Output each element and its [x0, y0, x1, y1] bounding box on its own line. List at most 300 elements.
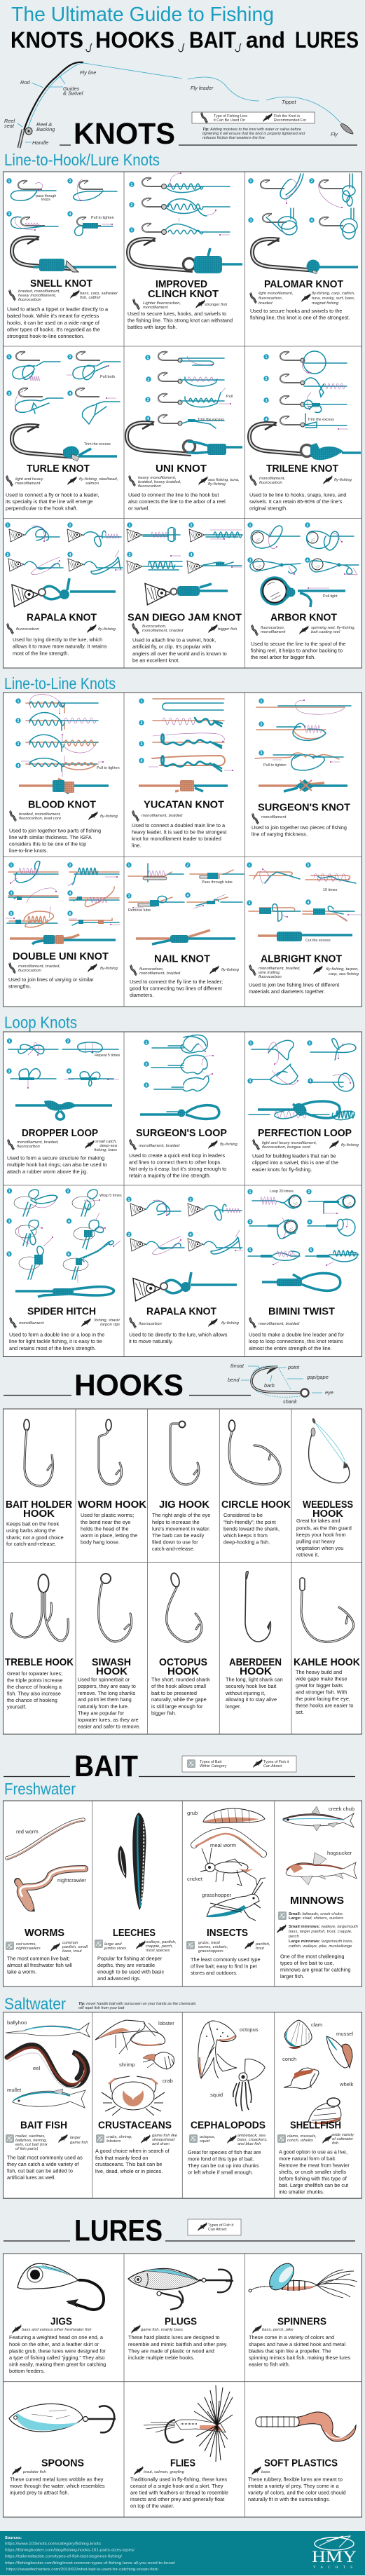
knot: nail	[126, 862, 244, 998]
knot: double uni: 5	[11, 912, 13, 916]
description: Great for lakes and	[296, 1518, 340, 1524]
title: HOOK	[23, 1508, 55, 1520]
title: HOOKS	[95, 27, 174, 53]
title: SHELLFISH	[290, 2120, 341, 2132]
bait types: ballyhoo, herring,	[15, 2139, 47, 2143]
line types	[132, 624, 184, 634]
target fish	[207, 624, 237, 633]
knot: spider hitch: 6	[68, 1253, 70, 1257]
knot: san diego jam: 2	[191, 524, 193, 528]
bait: insects: grasshopper	[202, 1892, 232, 1898]
knot: trilene: 3	[266, 399, 268, 403]
line types	[10, 1318, 44, 1328]
target fish: panfish,	[255, 1942, 270, 1947]
knot: uni: 3	[147, 398, 149, 402]
target fish: bigger fish	[218, 627, 237, 632]
line types: braided	[259, 301, 273, 306]
target fish	[86, 624, 116, 633]
logo: HMY Yachts	[312, 2536, 357, 2570]
legend: knot icons: Type of Fishing Line	[214, 114, 247, 118]
heading: knots: KNOTS	[74, 117, 175, 151]
target fish: fly-fishing	[341, 1143, 359, 1147]
target fish	[130, 2324, 183, 2333]
knot: trilene	[249, 351, 361, 512]
line types: braided, heavy braided,	[138, 480, 181, 484]
knot: snell	[6, 178, 118, 339]
bait: shellfish	[277, 2020, 354, 2195]
knot: nail: 3	[128, 894, 130, 899]
knot: bimini twist: 2	[308, 1190, 310, 1194]
target fish	[195, 299, 227, 308]
target fish: Small minnows:	[289, 1925, 320, 1929]
target fish	[88, 811, 118, 820]
description: almost the entire strength of the line.	[249, 1345, 332, 1351]
description: a type of fishing called “jigging.” They also	[9, 2354, 105, 2361]
description: Used to secure the line to the spool of the	[251, 641, 346, 647]
knot: rapala	[5, 522, 123, 656]
title: TURLE KNOT	[27, 463, 90, 475]
line types: monofilament, braided	[139, 1144, 180, 1148]
line types: fluorocarbon	[138, 484, 161, 489]
knot: perfection loop: 3	[249, 1079, 252, 1084]
legend: lure icons: Can Attract	[208, 2228, 227, 2232]
title: ARBOR KNOT	[270, 613, 337, 624]
target fish: tarpon rigs	[100, 1323, 120, 1327]
sources: https://fishingbooker.com/blog/most-common-types-of-fishing-lures-all-you-need-to-know/	[5, 2561, 175, 2565]
title: and	[246, 27, 285, 53]
description: minnows are great for catching	[280, 1967, 350, 1972]
heading: lures: LURES	[74, 2214, 163, 2248]
title: TRILENE KNOT	[266, 463, 338, 475]
knot: albright: 3	[249, 901, 251, 906]
description: considers this to be one of the top	[9, 841, 86, 847]
description: Not only is it easy, but it's strong enough to	[129, 1166, 226, 1172]
knot: bimini twist: 1	[249, 1190, 252, 1194]
sources: https://tailoredtackle.com/types-of-fish-bait-beginner-fishing/	[5, 2554, 122, 2558]
bait: shellfish: whelk	[339, 2081, 354, 2087]
description: and lines to connect them to other loops.	[129, 1159, 221, 1165]
description: allowing it to stay alive	[226, 1696, 277, 1703]
title: SURGEON'S KNOT	[258, 803, 350, 814]
target fish	[298, 625, 355, 634]
target fish	[198, 476, 240, 486]
description: These rubbery, flexible lures are meant to	[248, 2476, 343, 2483]
bait types	[95, 1940, 126, 1951]
line types: fluorocarbon,	[259, 297, 282, 301]
knot: albright: 4	[308, 901, 310, 905]
target fish: panfish, small	[62, 1945, 88, 1949]
line types	[253, 1140, 317, 1150]
knot: palomar: 4	[311, 219, 313, 223]
target fish: sea fishing, tuna,	[208, 478, 240, 482]
sources: https://www.101knots.com/category/fishing-knots	[5, 2542, 101, 2546]
diagram: hook anatomy: bend	[228, 1377, 240, 1383]
target fish: stronger fish	[205, 303, 227, 307]
target fish: Large minnows:	[289, 1940, 320, 1944]
description: injured prey to attract fish.	[10, 2490, 69, 2495]
diagram: hook anatomy	[228, 1363, 333, 1405]
bait types: worms, crickets,	[198, 1945, 228, 1949]
lure: spinners	[249, 2259, 357, 2368]
knot: palomar: 1	[250, 179, 252, 184]
description: its specialty is that the line will emerge	[6, 498, 92, 505]
target fish	[226, 2134, 268, 2146]
description: of live bait; easy to find in pet	[191, 1963, 257, 1970]
target fish: small catch,	[95, 1140, 117, 1144]
description: without injuring it,	[225, 1690, 266, 1696]
bait: crustaceans	[95, 2020, 178, 2174]
knot: snell: pass though	[36, 194, 56, 198]
line types: monofilament	[261, 815, 287, 819]
description: “fish-friendly”; the point	[223, 1519, 276, 1525]
line types: monofilament	[19, 1321, 44, 1326]
description: deep-hooking a fish.	[223, 1539, 270, 1546]
description: One of the most challenging	[280, 1953, 344, 1960]
bait types	[189, 2134, 215, 2144]
description: the chance of hooking	[7, 1697, 57, 1703]
line types: monofilament	[143, 306, 168, 310]
tip: Adding moisture to the knot with water or saliva before	[209, 128, 301, 132]
target fish: fly-fishing	[334, 478, 352, 482]
heading: line-to-line knots: Line-to-Line Knots	[4, 674, 116, 693]
knot: dropper loop: 2	[67, 1040, 69, 1044]
description: Used to tie line to hooks, snaps, lures, and	[249, 492, 346, 498]
description: line with similar thickness. The IGFA	[9, 834, 92, 840]
knot: albright: Cut the excess	[305, 939, 331, 943]
bait types	[278, 1911, 343, 1921]
description: strengths.	[8, 983, 31, 989]
target fish: bass, trout	[62, 1949, 82, 1954]
knot: palomar	[248, 174, 358, 321]
line types: light and heavy monofilament,	[262, 1141, 317, 1145]
description: diameters.	[130, 992, 153, 998]
target fish	[244, 1940, 270, 1951]
target fish: game fish	[70, 2141, 88, 2145]
knot: perfection loop: 1	[250, 1042, 252, 1046]
tip: reduces friction that weakens the line.	[202, 136, 266, 140]
title: WEEDLESS	[303, 1499, 353, 1511]
target fish	[252, 2324, 294, 2333]
panel: saltwater bait	[3, 2012, 361, 2198]
target fish	[11, 2324, 92, 2333]
knot: bimini twist: 3	[249, 1220, 252, 1225]
target fish	[140, 2134, 178, 2146]
description: ponds, as the thin guard	[296, 1525, 352, 1531]
bait types: mullet, sardines,	[15, 2134, 46, 2139]
line types	[252, 814, 287, 824]
description: for catch-and-release.	[6, 1541, 56, 1547]
hook: jig	[152, 1422, 210, 1552]
line types: fluorocarbon	[18, 298, 41, 302]
target fish: walleye, largemouth	[320, 1925, 358, 1929]
description: allows it to move more naturally. It retains	[13, 643, 107, 650]
description: Used to attach line to a swivel, hook,	[132, 636, 216, 643]
line types	[130, 965, 181, 976]
knot: bimini twist: 5	[249, 1248, 252, 1253]
panel: line-to-hook knots	[3, 172, 361, 668]
knot: uni: 1	[147, 356, 149, 360]
logo: HMY Yachts: HMY	[312, 2548, 357, 2565]
bait: worms	[6, 1820, 88, 1975]
description: Used to connect the line to the hook but	[128, 492, 219, 498]
description: The barb can be easily	[152, 1532, 205, 1539]
description: sink easily, making them great for catching	[9, 2361, 106, 2368]
description: line for light tackle fishing, it is easy to tie	[9, 1338, 102, 1344]
description: shapes and have a skirted hook and metal	[249, 2341, 345, 2347]
target fish: predator fish	[22, 2470, 46, 2474]
knot: rapala: 2	[69, 524, 71, 528]
knot: double uni	[6, 861, 120, 989]
description: fish, cut bait can be added to	[7, 2167, 73, 2174]
knot: arbor: 1	[249, 524, 252, 528]
line types: braided, monofilament,	[19, 812, 61, 817]
knot: improved clinch: 1	[131, 183, 133, 187]
description: materials and diameters together.	[249, 988, 325, 995]
description: retain a majority of the line strength.	[129, 1172, 211, 1179]
title: BAIT FISH	[20, 2120, 67, 2132]
bait types: Large:	[289, 1916, 301, 1921]
description: easier knots for fly-fishing.	[252, 1166, 312, 1173]
description: baited hook. While it's meant for eyeless	[7, 313, 99, 319]
description: A good option to use as a live,	[279, 2149, 347, 2155]
description: They are popular for	[78, 1710, 125, 1716]
title: BLOOD KNOT	[28, 800, 96, 811]
description: fishing reel, it helps to anchor backing to	[251, 648, 343, 653]
diagram: fly rod anatomy: Fly	[331, 131, 338, 137]
tip: sunscreen: will repel fish from your bait	[78, 2006, 125, 2010]
knot: rapala: 4	[69, 553, 71, 557]
target fish: bass, larger panfish, trout, crappie,	[289, 1930, 352, 1934]
description: knot for monofilament leader to braided	[132, 836, 221, 842]
title: RAPALA KNOT	[27, 613, 97, 624]
line types	[9, 963, 60, 973]
target fish: spinning reel, fly-fishing,	[311, 626, 355, 630]
description: the fishing line. This strong knot can withstand	[128, 318, 233, 324]
description: line-to-line knots.	[9, 847, 48, 854]
target fish	[207, 1318, 240, 1327]
description: The most common live bait;	[7, 1956, 70, 1961]
description: hooks, it can be used on a wide range of	[7, 320, 100, 326]
bait types: of fish parts)	[15, 2147, 38, 2151]
bait: insects: grub	[187, 1810, 198, 1816]
target fish: and blue fish	[237, 2142, 261, 2146]
target fish: fly-fishing	[208, 482, 226, 486]
target fish: bass, croackers,	[237, 2138, 268, 2142]
line types	[7, 624, 39, 634]
target fish: fly-fishing	[220, 1143, 238, 1147]
title: CLINCH KNOT	[148, 289, 219, 300]
title: OCTOPUS	[159, 1657, 207, 1668]
title: FLIES	[170, 2458, 195, 2469]
target fish	[50, 1941, 88, 1954]
line types	[6, 476, 44, 486]
bait: minnows	[276, 1806, 358, 1979]
description: pulling out heavy	[296, 1538, 335, 1545]
target fish: amberjack, sea	[237, 2134, 266, 2138]
target fish	[209, 965, 240, 974]
description: Used to secure lures, hooks, and swivels to	[128, 311, 226, 317]
knot: uni: 2	[148, 378, 150, 382]
knot: snell: 4	[69, 212, 71, 217]
title: KNOTS	[11, 27, 83, 53]
description: they can catch a wide variety of	[7, 2161, 79, 2167]
knot: dropper loop: 3	[8, 1070, 11, 1074]
target fish: catfish, walleye, pike, muskellunge	[289, 1944, 352, 1949]
description: and point let them hang	[78, 1696, 132, 1703]
legend: knot icons	[192, 112, 315, 123]
knot: uni: Trim the excess	[198, 418, 224, 422]
description: live, dead, whole or in pieces.	[95, 2168, 163, 2174]
target fish: magnet fishing	[312, 301, 339, 306]
knot: trilene: 2	[266, 377, 268, 381]
diagram: fly rod anatomy: Rod	[20, 79, 30, 86]
knot: turle: 2	[69, 355, 71, 360]
bait types	[6, 1942, 41, 1951]
description: or left whole if small enough.	[188, 2169, 253, 2176]
target fish: fly-fishing, steelhead,	[79, 477, 118, 482]
description: the point facing the eye,	[296, 1696, 350, 1702]
target fish	[133, 2466, 185, 2475]
knot: arbor: 3	[249, 559, 252, 563]
description: before fishing with this type of	[279, 2176, 347, 2181]
description: the triple points increase	[7, 1677, 63, 1684]
diagram: fly rod anatomy: Fly leader	[191, 85, 214, 91]
knot: albright: 2	[308, 864, 310, 868]
target fish: of saltwater	[332, 2137, 354, 2141]
description: retrieve it.	[296, 1552, 319, 1558]
description: are tied with feathers or thread to resemble	[130, 2490, 228, 2495]
target fish: carp, sea fishing	[329, 972, 359, 976]
bait: minnows: creek chub	[329, 1806, 354, 1812]
line types: braided, monofilament,	[18, 289, 60, 294]
knot: palomar: 3	[250, 219, 252, 223]
line types	[252, 625, 286, 635]
title: CIRCLE HOOK	[221, 1499, 291, 1511]
title: LEECHES	[113, 1928, 156, 1939]
description: vegetation when you	[296, 1545, 343, 1551]
description: plastic grub, these lures were designed for	[9, 2348, 106, 2354]
description: bottom feeders.	[9, 2368, 45, 2374]
title: MINNOWS	[290, 1895, 344, 1907]
description: loop to loop connections, this knot retains	[249, 1338, 343, 1344]
description: naturally, while the gape	[151, 1696, 207, 1703]
knot: spider hitch: 4	[68, 1220, 70, 1224]
title: JIGS	[50, 2317, 72, 2328]
knot: dropper loop	[6, 1038, 120, 1175]
description: These hard plastic lures are designed to	[128, 2334, 220, 2340]
knot: turle: 4	[69, 392, 71, 396]
bait: insects: cricket	[187, 1876, 203, 1882]
line types: fluorocarbon,	[142, 625, 166, 629]
knot: double uni: 6	[69, 912, 71, 916]
description: the bend near the eye	[81, 1519, 130, 1525]
knot: nail: 2	[187, 864, 189, 868]
legend: bait icons: Types of Bait	[200, 1760, 222, 1764]
tip: sunscreen: never handle bait with sunscreen on your hands as the chemicals	[85, 2002, 196, 2006]
description: Used to join two fishing lines of different	[249, 981, 339, 988]
bait types: squid	[200, 2139, 210, 2144]
title: The Ultimate Guide to Fishing	[11, 4, 274, 26]
target fish: sheepshead	[152, 2138, 175, 2142]
line types	[8, 1140, 59, 1150]
title: HOOK	[96, 1666, 128, 1677]
bait types: crabs, shrimp,	[106, 2135, 132, 2139]
line types	[250, 292, 293, 306]
hook: worm	[78, 1419, 147, 1546]
knot: arbor: Pull tight	[323, 594, 338, 599]
description: clipped into a swivel, this is one of the	[252, 1159, 338, 1166]
knot: blood	[9, 695, 120, 854]
knot: blood: Pull to tighten	[97, 766, 120, 770]
knot: san diego jam: 4	[191, 553, 193, 557]
lure: spoons	[9, 2404, 116, 2495]
title: YUCATAN KNOT	[144, 800, 224, 811]
bait: cephalopods	[188, 2021, 268, 2176]
target fish: bass, carp, saltwater	[80, 292, 118, 296]
target fish	[301, 292, 355, 306]
bait types: Small:	[289, 1912, 301, 1916]
knot: san diego jam	[127, 522, 242, 663]
description: Used to create a quick end loop in leaders	[129, 1152, 225, 1159]
knot: yucatan: 2	[141, 721, 143, 725]
bait types: octopus,	[200, 2135, 215, 2139]
title: SURGEON'S LOOP	[136, 1128, 227, 1139]
knot: yucatan	[132, 698, 233, 849]
title: SOFT PLASTICS	[264, 2458, 338, 2469]
knot: arbor	[247, 522, 359, 660]
knot: snell: Pull to tighten	[91, 216, 114, 220]
description: shank; not a good choice	[6, 1534, 64, 1541]
description: strongest hook-to-line connection.	[7, 333, 84, 339]
bait: shellfish: conch	[282, 2056, 296, 2062]
line types: fluorocarbon	[17, 1145, 40, 1149]
knot: spider hitch: 5	[8, 1253, 11, 1257]
knot: spider hitch: 3	[8, 1220, 11, 1224]
diagram: fly rod anatomy: Reel	[4, 118, 15, 124]
knot: nail: 4	[187, 894, 189, 898]
target fish: bass	[261, 2470, 270, 2474]
target fish: perch	[288, 1935, 299, 1939]
line types: fluorocarbon,	[139, 967, 163, 972]
line types: fluorocarbon	[139, 1322, 162, 1326]
line types: monofilament	[15, 482, 41, 486]
legend: knot icons: it Can Be Used On	[214, 118, 245, 123]
knot: san diego jam: 3	[129, 553, 131, 557]
description: Traditionally used in fly-fishing, these lures	[130, 2476, 227, 2483]
bait types: grasshoppers	[198, 1949, 223, 1954]
panel: freshwater bait	[3, 1801, 361, 1986]
description: Used for building leaders that can be	[252, 1152, 336, 1159]
panel: lures	[3, 2254, 361, 2517]
description: which keeps it from	[223, 1532, 268, 1539]
bait: shellfish: mussel	[336, 2031, 353, 2037]
title: SPOONS	[41, 2458, 84, 2469]
bait: minnows: hogsucker	[327, 1850, 352, 1856]
knot: nail: 1	[128, 864, 130, 868]
legend: lure icons	[188, 2219, 241, 2235]
legend: bait icons	[182, 1756, 296, 1772]
target fish: fly-fishing	[100, 815, 118, 819]
title: HOOK	[312, 1508, 344, 1520]
knot: blood: 1	[18, 700, 20, 704]
description: great for bigger baits	[296, 1682, 343, 1689]
line types: monofilament, braided	[259, 1322, 300, 1326]
diagram: fly rod anatomy	[4, 62, 353, 148]
description: include multiple treble hooks.	[128, 2354, 195, 2361]
description: swivels. It can retain 85-90% of the line's	[249, 498, 343, 505]
description: remove. The long shanks	[78, 1690, 136, 1696]
target fish: salmon	[85, 482, 99, 486]
